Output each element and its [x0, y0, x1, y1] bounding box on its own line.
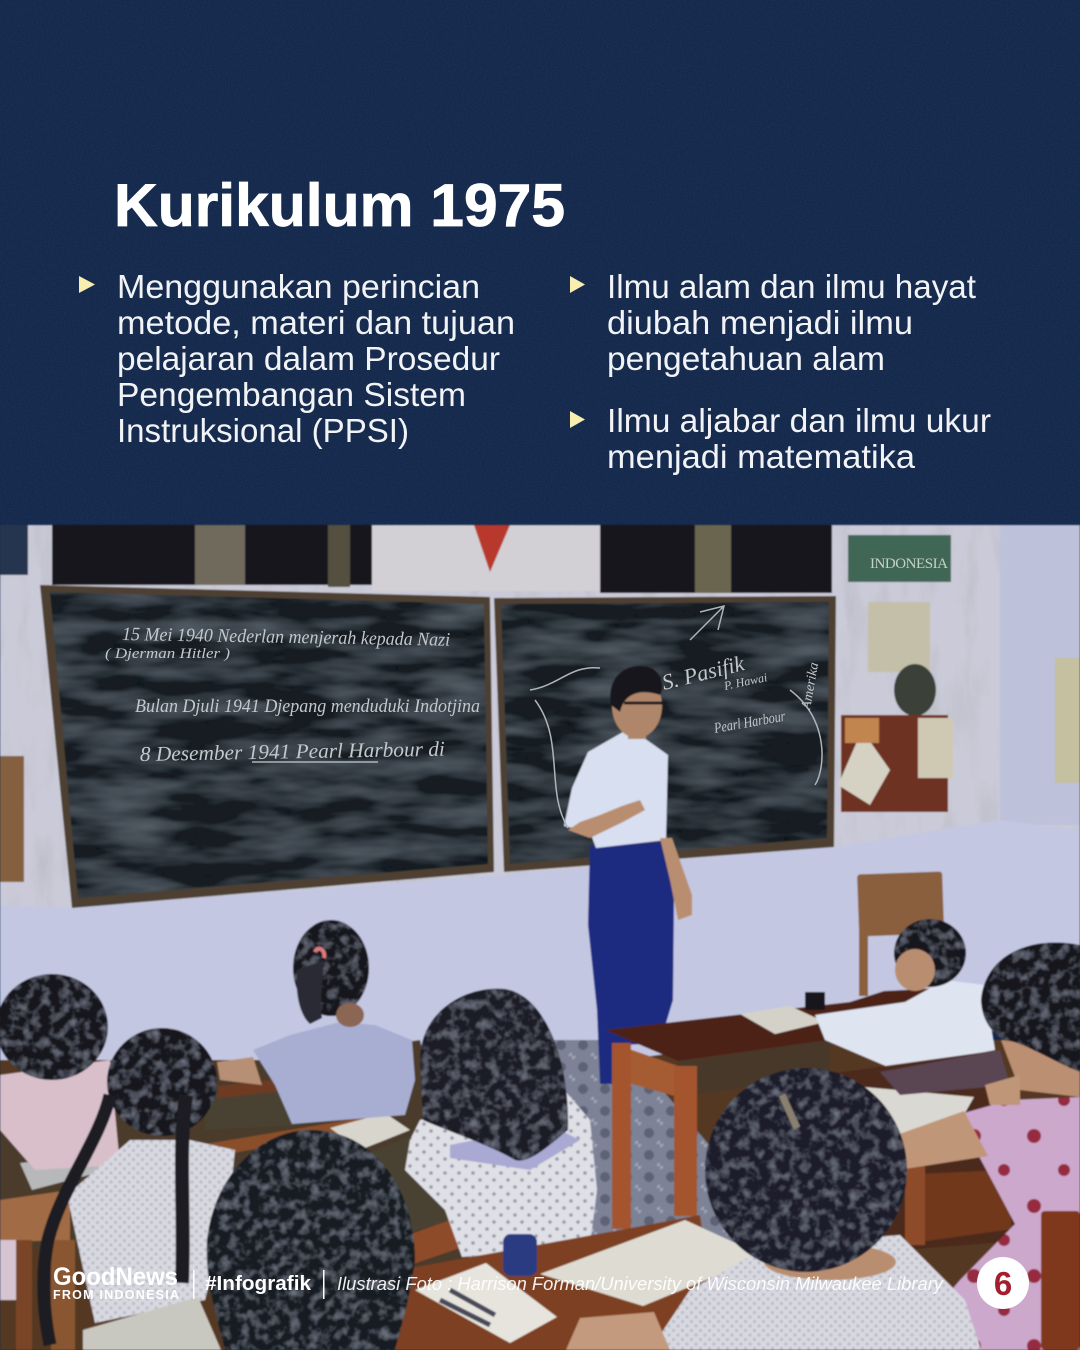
front centre student [207, 1130, 415, 1350]
logo GoodNews: FROM INDONESIA [53, 1288, 179, 1302]
right bullet text 1 [607, 268, 976, 377]
teacher [564, 666, 692, 1084]
chalk writing: P. Hawai [722, 670, 768, 693]
front right student [566, 1068, 981, 1350]
upper wall [0, 525, 1080, 925]
right poster [1055, 658, 1080, 783]
chalk writing: 8 Desember 1941 Pearl Harbour di [140, 737, 445, 766]
front desk [395, 1215, 764, 1350]
right bullet text 1: Ilmu alam dan ilmu hayat [607, 268, 976, 305]
left rear desks [0, 1040, 470, 1350]
chalk writing: 15 Mei 1940 Nederlan menjerah kepada Nazi [122, 624, 450, 651]
chalk writing: Pearl Harbour [712, 709, 787, 737]
icon: left bullet arrow [79, 276, 95, 293]
divider one [193, 1270, 194, 1299]
right bullet text 1: diubah menjadi ilmu [607, 304, 913, 341]
floor [400, 1040, 790, 1270]
right bullet text 2: menjadi matematika [607, 438, 916, 475]
middle right desk [790, 1050, 1030, 1250]
chalk writing [105, 556, 948, 766]
icon: right bullet arrow 2 [570, 411, 585, 428]
pennant [474, 525, 510, 572]
braided student [44, 1028, 235, 1345]
right bullet text 1: pengetahuan alam [607, 340, 885, 377]
title: Kurikulum 1975 [114, 172, 565, 239]
page number badge: 6 [994, 1265, 1012, 1302]
blue blouse student [217, 920, 415, 1124]
left bullet text: Pengembangan Sistem [117, 376, 466, 413]
classroom photo illustration [0, 525, 1080, 1350]
icon: right bullet arrow 1 [570, 276, 585, 293]
plant [894, 664, 936, 716]
far left student [0, 974, 120, 1300]
left bullet text: metode, materi dan tujuan [117, 304, 515, 341]
chalk drawings [252, 606, 822, 828]
centre student [405, 989, 597, 1257]
map poster [0, 525, 28, 575]
navy textured background [0, 0, 1080, 526]
page number badge [977, 1257, 1029, 1309]
chalk writing: ( Djerman Hitler ) [105, 646, 230, 662]
back desk with boy [605, 919, 1000, 1229]
logo GoodNews: GoodNews [53, 1263, 178, 1291]
hashtag: #Infografik [205, 1273, 312, 1295]
photo credit: Ilustrasi Foto : Harrison Forman/University of Wisconsin Milwaukee Library [337, 1274, 944, 1294]
chalk writing: S. Pasifik [659, 650, 748, 695]
right chair [1041, 1211, 1080, 1350]
chair [857, 872, 944, 996]
lower wall [0, 820, 1080, 1060]
right bullet text 2: Ilmu aljabar dan ilmu ukur [607, 402, 991, 439]
left bullet text [117, 268, 515, 449]
right bullet text block 1 [570, 268, 976, 377]
divider two [323, 1270, 324, 1299]
left edge poster [0, 756, 24, 882]
pinned paper [868, 602, 930, 672]
footer bar [53, 1257, 1029, 1309]
right bullet text block 2 [570, 402, 991, 475]
right bullet text 2 [607, 402, 991, 475]
left chalkboard [40, 585, 494, 908]
front left book [83, 1297, 221, 1350]
base shadow under furniture [0, 1040, 1080, 1350]
logo GoodNews [53, 1263, 179, 1302]
chalk writing: Bulan Djuli 1941 Djepang menduduki Indotjina [135, 696, 480, 717]
right chalkboard [494, 596, 836, 872]
upper windows [52, 525, 372, 585]
left bullet text block [79, 268, 515, 449]
left bullet text: Menggunakan perincian [117, 268, 480, 305]
Indonesia sign [848, 535, 951, 582]
chalk writing: INDONESIA [870, 556, 948, 572]
noticeboard [841, 715, 948, 812]
right student [888, 942, 1080, 1350]
left bullet text: Instruksional (PPSI) [117, 412, 409, 449]
chalk writing: Amerika [799, 661, 822, 712]
left bullet text: pelajaran dalam Prosedur [117, 340, 500, 377]
